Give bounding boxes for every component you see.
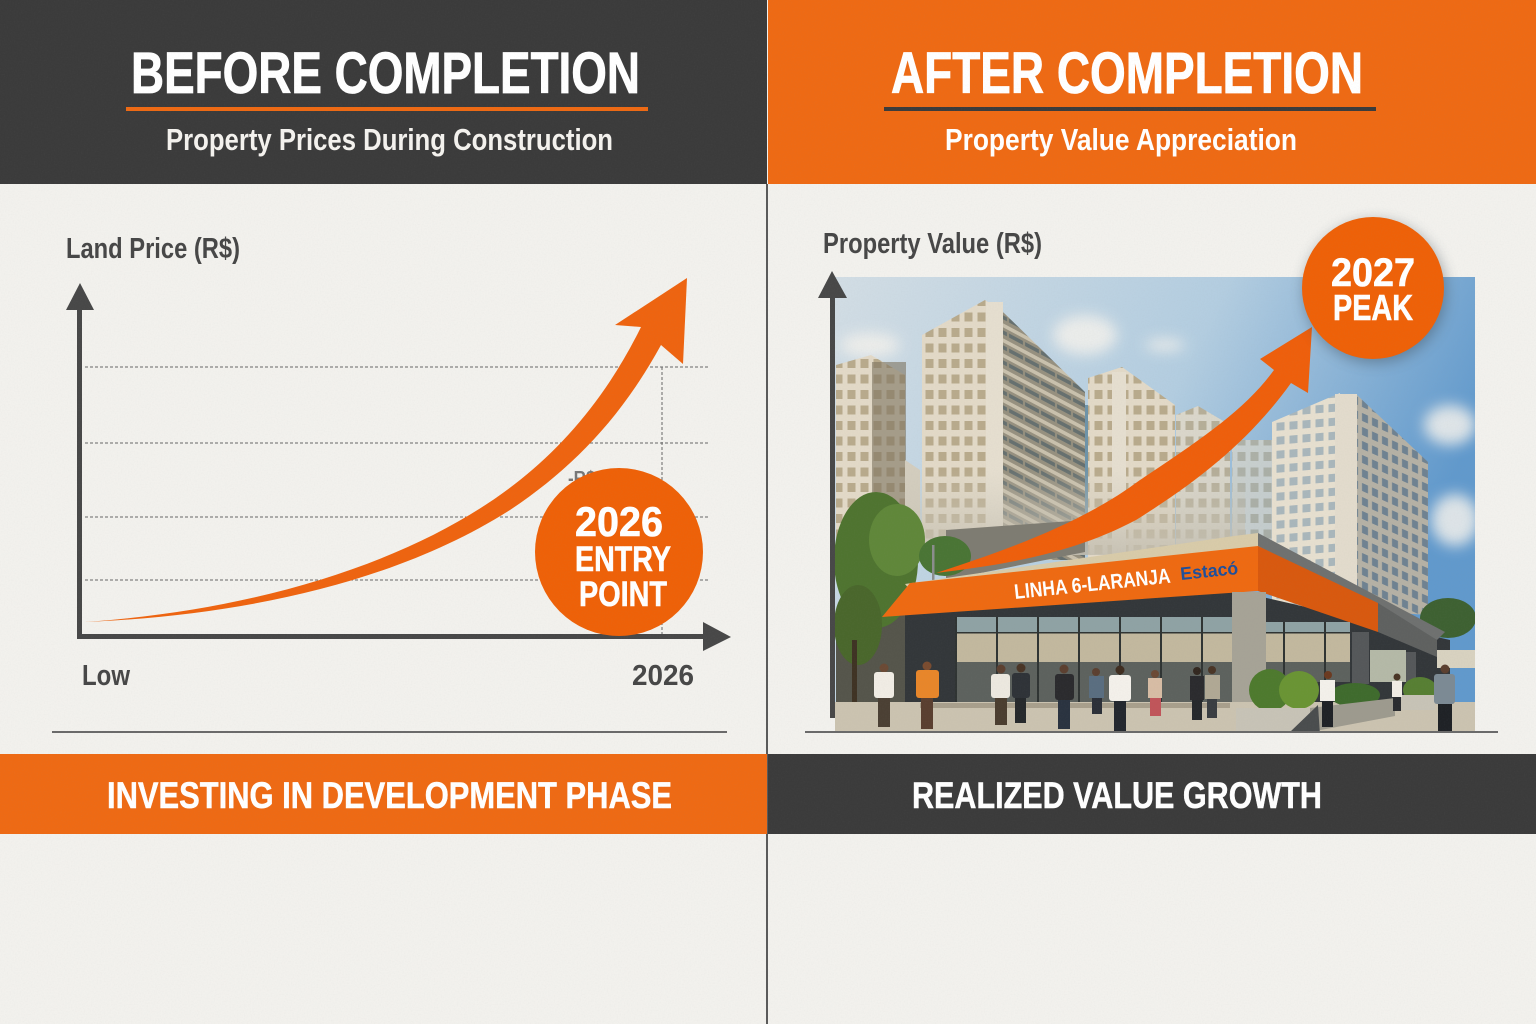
banner: investing in development phase xyxy=(0,754,767,834)
banner: realized value growth: REALIZED VALUE GROWTH xyxy=(912,775,1322,816)
sign text: linha 6-laranja: LINHA 6-LARANJA xyxy=(1013,565,1172,604)
growth arrow: property value xyxy=(936,327,1312,573)
subtitle: after: Property Value Appreciation xyxy=(945,122,1297,157)
station building xyxy=(882,533,1475,717)
y axis arrow xyxy=(66,283,94,639)
clouds xyxy=(840,315,1479,546)
y axis arrow: property value xyxy=(818,271,847,718)
tree xyxy=(834,492,971,702)
glass facade xyxy=(955,617,1232,705)
axis label: property value: Property Value (R$) xyxy=(823,228,1042,260)
axis label: land price: Land Price (R$) xyxy=(66,233,240,265)
title: before completion: BEFORE COMPLETION xyxy=(131,41,640,106)
haze xyxy=(920,478,1245,555)
panel: before completion header xyxy=(0,0,767,184)
sign logo: estaco: Estacó xyxy=(1179,558,1239,584)
subtitle: before: Property Prices During Construction xyxy=(166,122,613,157)
planters xyxy=(1249,669,1434,731)
banner: realized value growth xyxy=(768,754,1536,834)
growth arrow xyxy=(85,278,687,622)
shaded wall xyxy=(836,615,905,702)
panel: after completion header xyxy=(768,0,1536,184)
podium xyxy=(946,520,1085,580)
badge: 2027 peak xyxy=(1302,217,1446,363)
chart: land price xyxy=(66,233,731,692)
badge: 2027 peak: PEAK xyxy=(1333,287,1413,328)
pavement xyxy=(835,702,1475,732)
pillars xyxy=(1232,592,1266,702)
tower 2 xyxy=(922,300,1085,562)
tower 5 xyxy=(1272,393,1428,615)
x axis arrow xyxy=(77,622,731,651)
tower 4 xyxy=(1176,406,1272,544)
tower 1 xyxy=(836,355,920,538)
orange sign band xyxy=(882,546,1258,617)
title: after completion: AFTER COMPLETION xyxy=(891,41,1363,106)
x label: 2026: 2026 xyxy=(632,660,694,692)
tower 3 xyxy=(1085,367,1175,560)
distant trees xyxy=(1420,598,1476,638)
pedestrians xyxy=(874,662,1455,734)
photo: station and towers xyxy=(834,277,1479,735)
badge: 2026 entry point: 2026 xyxy=(575,498,663,545)
badge: 2026 entry point: POINT xyxy=(579,575,667,614)
badge: 2026 entry point xyxy=(535,468,703,636)
badge: 2026 entry point: ENTRY xyxy=(575,540,671,579)
banner: investing in development phase: INVESTING IN DEVELOPMENT PHASE xyxy=(107,775,672,816)
badge: 2027 peak: 2027 xyxy=(1331,251,1415,295)
x label: low: Low xyxy=(82,660,130,692)
faint chart label: -R$ 3.000 xyxy=(568,468,643,490)
lamp post xyxy=(932,545,934,580)
